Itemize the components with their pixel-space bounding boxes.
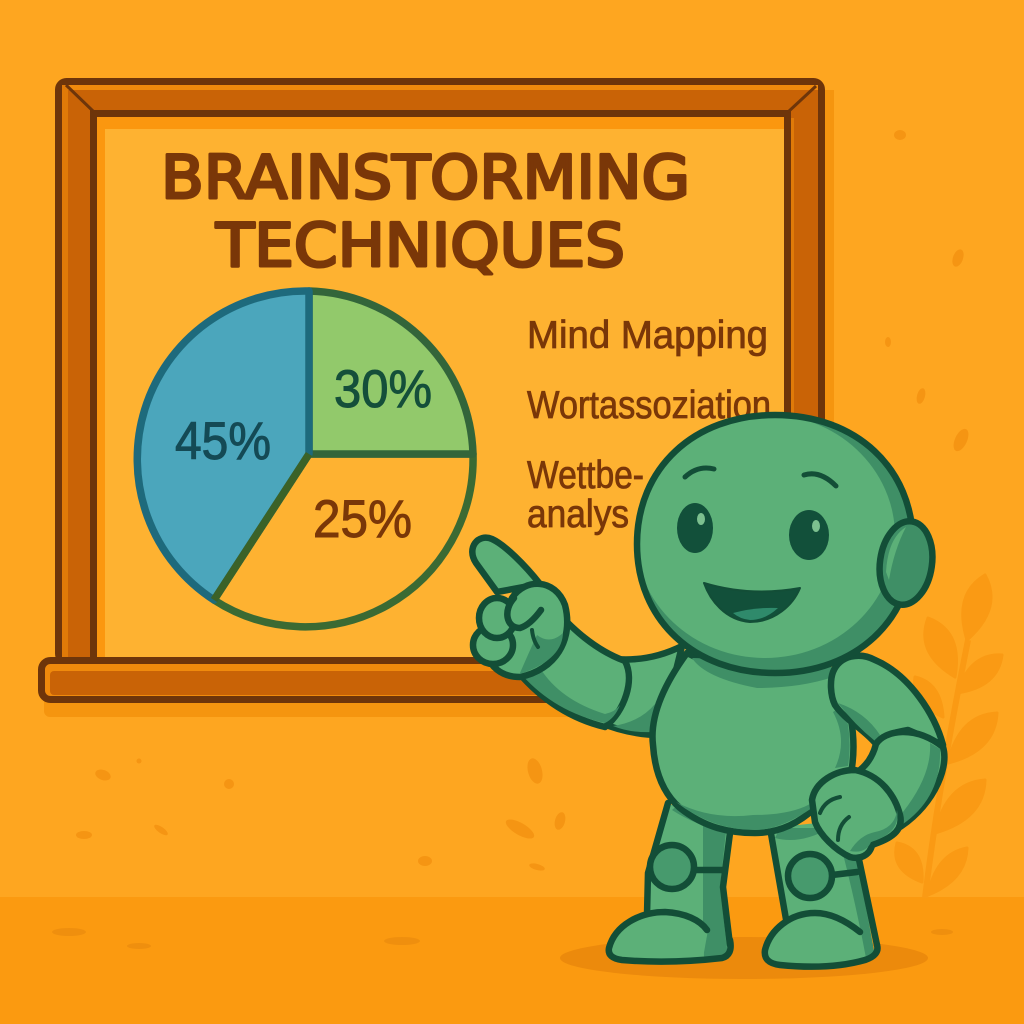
slice: 45% [137,291,309,600]
brows [685,468,836,486]
right hand [812,770,901,858]
right leg [770,820,877,962]
pie labels: 25% [313,490,412,549]
title [161,143,690,281]
pie chart [137,291,473,627]
pointing finger [472,538,540,592]
background plant [896,575,1002,898]
legend labels: Mind Mapping [527,314,768,357]
ear [874,518,938,608]
mouth [704,583,800,622]
legend labels: Wortassoziation [527,384,771,427]
head [635,414,913,673]
legend labels: Wettbe- [527,454,644,497]
body [652,653,853,833]
left foot [609,912,731,962]
pointing fist [473,584,567,677]
slice divider [214,454,309,600]
robot [472,414,944,979]
right upper arm [831,656,943,745]
legend labels [527,314,771,536]
title: BRAINSTORMING [161,143,690,213]
slice: 25% [214,454,473,627]
right foot [765,913,878,967]
pie labels: 45% [175,412,271,471]
title: TECHNIQUES [215,211,625,281]
pointing upper arm [598,646,682,735]
pointing forearm [518,622,629,727]
slice: 30% [309,291,473,454]
shadow [560,937,928,979]
board tray [42,660,602,717]
pie labels: 30% [334,360,432,419]
eyes [677,503,829,560]
right forearm [835,732,944,850]
left leg [647,803,730,958]
background speckles [52,130,972,949]
legend labels: analys [527,493,629,536]
pie labels [175,360,432,549]
whiteboard frame [58,82,834,662]
